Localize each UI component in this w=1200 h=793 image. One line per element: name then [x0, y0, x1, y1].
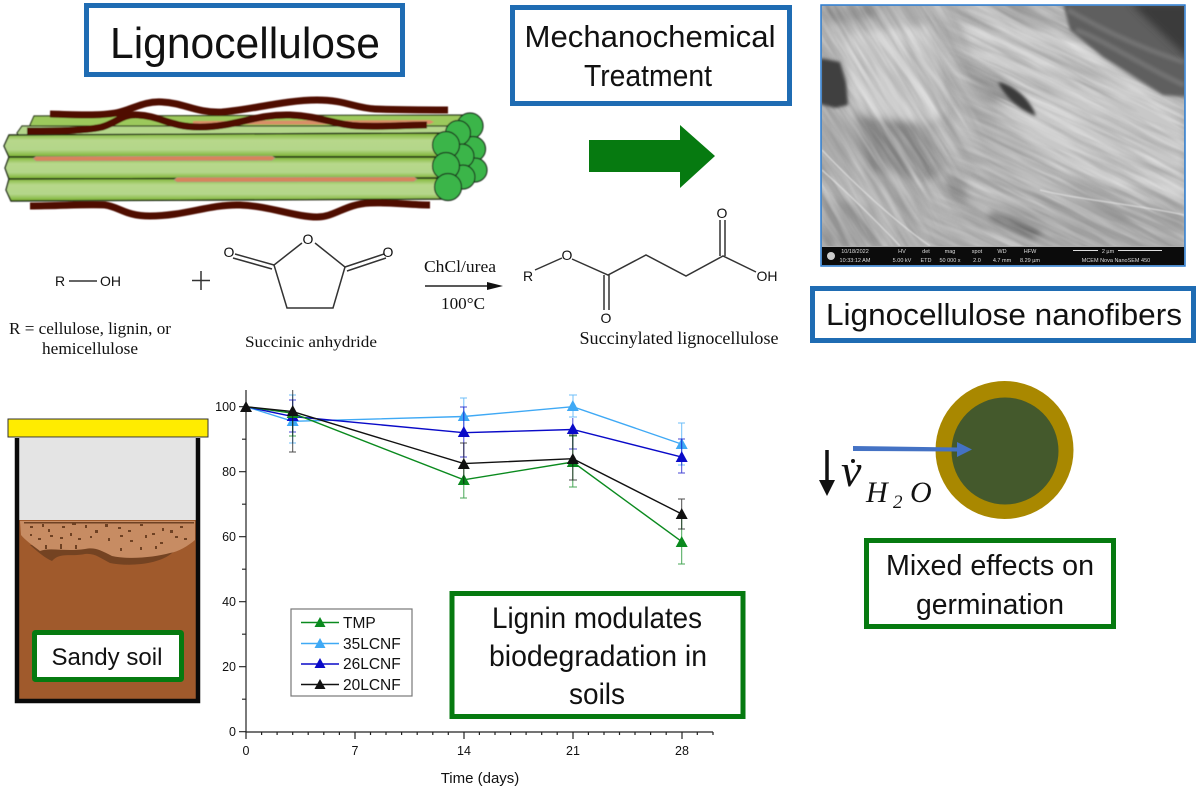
equation: decreased water uptake rate: O [910, 476, 932, 509]
reaction labels [9, 319, 779, 358]
plus sign [192, 271, 210, 290]
back fibers [17, 115, 470, 140]
axis labels: 0 [229, 725, 236, 739]
SEM micrograph: spot [972, 249, 983, 255]
hemicellulose strands on front fibers [33, 156, 275, 161]
reaction arrow and conditions: 100°C [441, 294, 485, 313]
series: 20LCNF [240, 390, 688, 529]
dark left notch [820, 58, 848, 108]
product structure: R [523, 268, 533, 284]
front fibers [4, 133, 447, 201]
SEM micrograph: ETD [920, 258, 932, 264]
lignin strands [27, 100, 448, 217]
legend: 26LCNF [343, 656, 401, 673]
reaction labels: R = cellulose, lignin, or [9, 319, 171, 338]
product structure: O [601, 310, 612, 326]
axis labels [215, 400, 236, 739]
arrow: water uptake [853, 442, 972, 457]
axis labels: 100 [215, 400, 236, 414]
box: Mechanochemical Treatment [512, 8, 790, 104]
line chart: biodegradation over time: 14 [457, 744, 471, 758]
legend: 20LCNF [343, 677, 401, 694]
series: TMP [246, 407, 688, 564]
axis labels: 40 [222, 595, 236, 609]
SEM micrograph: mag [945, 249, 955, 255]
icon: lignocellulose fiber bundle [4, 100, 487, 217]
x axis title: Time (days) [441, 770, 519, 787]
jar lid [8, 419, 208, 437]
equation: decreased water uptake rate: v [841, 445, 862, 496]
box: Mechanochemical Treatment: Treatment [584, 58, 712, 93]
reaction arrow and conditions: ChCl/urea [424, 257, 496, 276]
box: Lignin modulates biodegradation in soils: biodegradation in [489, 640, 707, 673]
box: Mixed effects on germination: germination [916, 589, 1064, 621]
crevice [998, 82, 1036, 116]
line chart: biodegradation over time: 28 [675, 744, 689, 758]
box: Mixed effects on germination: Mixed effects on [886, 550, 1094, 582]
SEM micrograph: det [922, 249, 930, 255]
arrow: process direction [589, 125, 715, 188]
title box: Lignocellulose: Lignocellulose [110, 19, 380, 68]
reactant: R-OH: R [55, 273, 65, 289]
icon: soil jar [8, 419, 208, 701]
SEM micrograph: 10/18/2022 [841, 249, 869, 255]
box: Sandy soil [34, 632, 182, 680]
hemicellulose strand on back fiber [193, 120, 434, 124]
succinic anhydride structure [224, 231, 394, 308]
SEM micrograph: WD [997, 249, 1007, 255]
product structure: OH [756, 268, 778, 284]
succinic anhydride structure: O [224, 244, 235, 260]
succinic anhydride structure: O [383, 244, 394, 260]
SEM micrograph: 5.00 kV [893, 258, 912, 264]
box: Lignin modulates biodegradation in soils [452, 594, 743, 716]
succinic anhydride structure: O [303, 231, 314, 247]
reaction labels: Succinic anhydride [245, 334, 377, 351]
line chart: biodegradation over time [215, 390, 713, 787]
product structure: O [562, 247, 573, 263]
box: Lignin modulates biodegradation in soils: Lignin modulates [492, 602, 702, 635]
reactant: R-OH [55, 273, 121, 289]
axis labels: 20 [222, 660, 236, 674]
sand layer [30, 545, 185, 565]
axis labels: 60 [222, 530, 236, 544]
series: 26LCNF [246, 400, 688, 473]
SEM micrograph [820, 4, 1186, 267]
fiber texture [822, 6, 972, 246]
equation: decreased water uptake rate [819, 445, 932, 513]
title box: Lignocellulose [86, 6, 402, 74]
reaction labels: Succinylated lignocellulose [580, 328, 779, 348]
dark upper-right region [1063, 3, 1190, 97]
axis labels: 80 [222, 465, 236, 479]
line chart: biodegradation over time: 0 [243, 744, 250, 758]
legend: 35LCNF [343, 636, 401, 653]
end caps back row [446, 113, 487, 189]
box: Mixed effects on germination [866, 540, 1114, 626]
line chart: biodegradation over time: 7 [352, 744, 359, 758]
equation: decreased water uptake rate: 2 [893, 492, 903, 513]
SEM micrograph: MCEM Nova NanoSEM 450 [1082, 258, 1150, 264]
reaction arrow and conditions [424, 257, 503, 313]
SEM micrograph: 50 000 x [939, 258, 961, 264]
jar walls [17, 438, 198, 701]
product structure: O [717, 205, 728, 221]
reaction labels: hemicellulose [42, 339, 138, 358]
SEM micrograph: 2 µm [1102, 249, 1115, 255]
reaction scheme [9, 205, 779, 358]
SEM micrograph: 4.7 mm [993, 258, 1012, 264]
broad light and shade [823, 5, 1184, 246]
box: Sandy soil: Sandy soil [52, 644, 162, 671]
end caps front row [432, 132, 462, 200]
SEM data bar [822, 247, 1184, 265]
SEM micrograph: 8.29 µm [1020, 258, 1040, 264]
box: Lignocellulose nanofibers [812, 288, 1194, 340]
line chart: biodegradation over time: 21 [566, 744, 580, 758]
equation: decreased water uptake rate: H [865, 476, 890, 509]
box: Lignocellulose nanofibers: Lignocellulose nanofibers [826, 297, 1182, 332]
legend [291, 609, 412, 696]
SEM micrograph: HV [898, 249, 906, 255]
SEM micrograph: HFW [1024, 249, 1037, 255]
legend: TMP [343, 615, 376, 632]
SEM micrograph: 2.0 [973, 258, 981, 264]
box: Mechanochemical Treatment: Mechanochemical [524, 19, 776, 54]
axes [239, 390, 713, 739]
series: 35LCNF [246, 395, 688, 465]
box: Lignin modulates biodegradation in soils: soils [569, 678, 625, 711]
bright fibers [822, 150, 1184, 246]
reactant: R-OH: OH [100, 273, 121, 289]
product structure [523, 205, 778, 326]
icon: seed cross-section [853, 381, 1074, 519]
SEM micrograph: 10:33:12 AM [840, 258, 871, 264]
